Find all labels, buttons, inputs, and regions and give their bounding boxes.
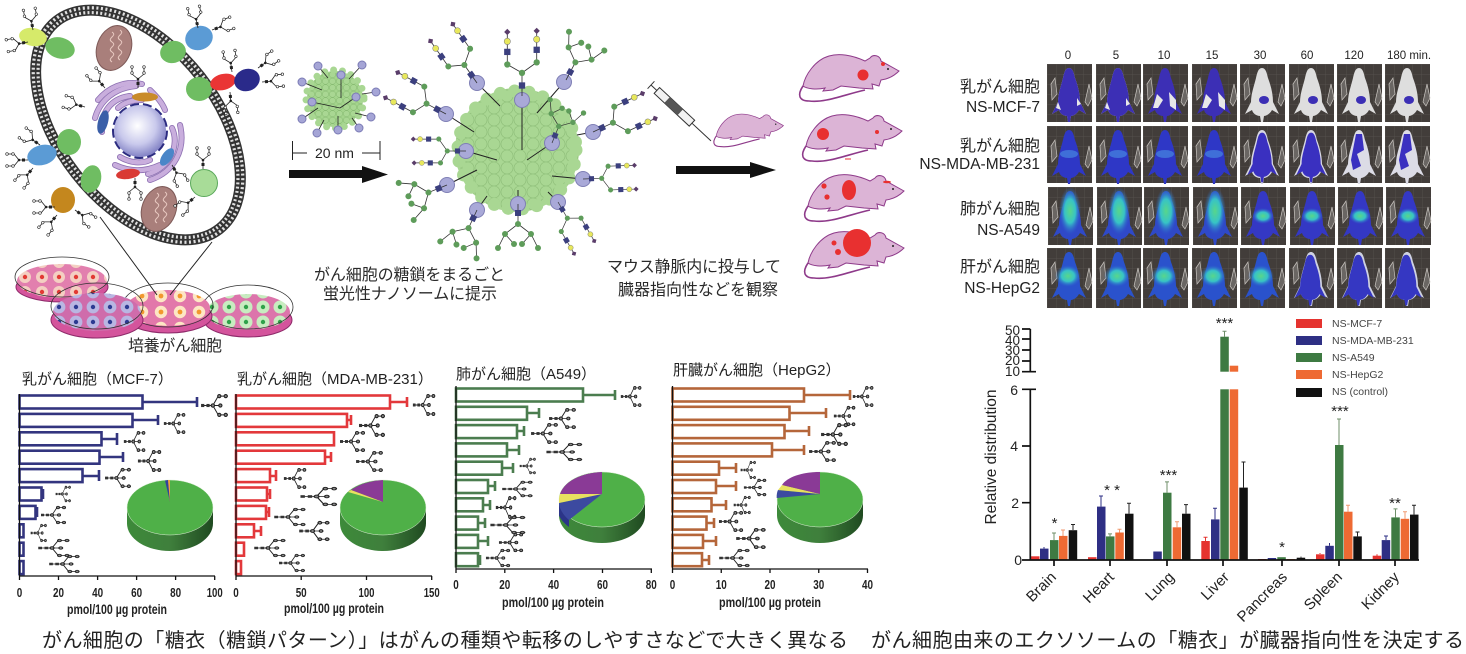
- tick labels: 150: [424, 585, 440, 600]
- golgi membranes: [95, 83, 182, 180]
- tick labels: 20: [53, 585, 64, 600]
- axis label: pmol/100 µg protein: [67, 602, 167, 617]
- tick labels: 10: [716, 577, 727, 592]
- tick labels: 60: [131, 585, 142, 600]
- y tick labels: [1005, 323, 1022, 568]
- row labels: 乳がん細胞: [960, 78, 1040, 96]
- y tick labels: 40: [1005, 333, 1020, 348]
- mitochondria: [90, 21, 183, 236]
- mouse 3: [805, 175, 904, 221]
- significance stars: *: [1279, 539, 1285, 556]
- tick labels: 40: [548, 577, 559, 592]
- tick labels: 100: [207, 585, 223, 600]
- syringe: [648, 81, 714, 145]
- imaging grid: [1047, 64, 1431, 308]
- panel: cancer cell with surface glycans: [0, 0, 285, 278]
- series: NS-MCF-7: [1031, 537, 1381, 560]
- legend: NS-MDA-MB-231: [1332, 335, 1414, 347]
- glycan structures: [719, 386, 873, 567]
- axis label: pmol/100 µg protein: [502, 595, 604, 610]
- heading: 肝臓がん細胞（HepG2）: [673, 362, 841, 379]
- tick labels: 20: [764, 577, 776, 592]
- significance stars: *: [1052, 515, 1058, 532]
- tick labels: [17, 585, 223, 600]
- tick labels: 30: [813, 577, 824, 592]
- bars: [20, 396, 197, 574]
- tick labels: 0: [670, 577, 675, 592]
- tick labels: 80: [170, 585, 181, 600]
- heading: 乳がん細胞（MCF-7）: [22, 371, 173, 388]
- mouse 2: [803, 115, 902, 161]
- tick labels: 0: [453, 577, 459, 592]
- significance stars: ***: [1160, 467, 1177, 484]
- caption: glycan display: がん細胞の糖鎖をまるごと: [314, 266, 505, 284]
- chart: A549: [453, 366, 657, 610]
- scale bar: 20 nm: [292, 141, 380, 161]
- tick labels: [453, 577, 657, 592]
- zoom lines: [100, 217, 212, 295]
- series: NS-MDA-MB-231: [1040, 496, 1390, 560]
- bars: [456, 388, 615, 566]
- small nanosome: [298, 61, 380, 137]
- category labels: Liver: [1198, 569, 1233, 604]
- vesicle: [173, 147, 218, 217]
- category labels: Heart: [1080, 568, 1118, 607]
- significance stars: ***: [1331, 403, 1349, 420]
- pie chart: [777, 472, 863, 543]
- tick labels: 80: [646, 577, 657, 592]
- mouse: injected: [714, 114, 783, 147]
- row labels: 肝がん細胞: [960, 258, 1040, 276]
- legend: NS (control): [1332, 386, 1388, 398]
- legend: NS-MCF-7: [1332, 318, 1382, 330]
- bars: [236, 396, 407, 574]
- tick labels: [670, 577, 873, 592]
- caption: injection: 臓器指向性などを観察: [618, 281, 778, 299]
- row labels: [919, 78, 1040, 297]
- pie chart: [559, 472, 645, 543]
- chart: HepG2: [670, 362, 873, 610]
- arrow: [289, 166, 388, 183]
- row labels: NS-A549: [977, 222, 1040, 239]
- mouse 4: [805, 229, 904, 278]
- significance stars: **: [1389, 495, 1401, 512]
- pie chart: [127, 480, 213, 551]
- tick labels: 40: [862, 577, 873, 592]
- heading: 肺がん細胞（A549）: [456, 366, 596, 383]
- y tick labels: 10: [1005, 364, 1020, 379]
- significance stars: * *: [1104, 482, 1120, 499]
- legend: [1296, 318, 1414, 398]
- arrow: [676, 162, 776, 178]
- axes: [672, 386, 868, 573]
- category labels: Spleen: [1301, 569, 1346, 614]
- row labels: 乳がん細胞: [960, 137, 1040, 155]
- time axis labels: 60: [1301, 50, 1313, 62]
- tick labels: 0: [233, 585, 239, 600]
- dish: orange cells: [123, 283, 213, 333]
- time axis labels: 0: [1065, 50, 1071, 62]
- series: NS-HepG2: [1059, 366, 1409, 560]
- pie chart: [340, 480, 426, 551]
- category labels: Kidney: [1358, 568, 1403, 613]
- row labels: NS-MCF-7: [966, 99, 1040, 116]
- row labels: NS-MDA-MB-231: [919, 156, 1040, 173]
- glycan structures: [31, 395, 228, 573]
- mouse 1: [800, 55, 899, 101]
- y tick labels: 4: [1010, 438, 1018, 454]
- y tick labels: 50: [1005, 323, 1020, 338]
- mice with organ signals: [800, 55, 904, 278]
- conclusion: right: がん細胞由来のエクソソームの「糖衣」が臓器指向性を決定する: [871, 629, 1464, 652]
- dish: red cells: [15, 257, 109, 302]
- row labels: NS-HepG2: [964, 280, 1040, 297]
- y tick labels: 2: [1011, 495, 1019, 511]
- time axis labels: 120: [1344, 50, 1364, 62]
- significance stars: [1052, 315, 1401, 556]
- significance stars: ***: [1216, 315, 1233, 332]
- chart: MDA-MB-231: [233, 371, 440, 616]
- axes: [456, 386, 652, 573]
- category labels: [1023, 568, 1403, 626]
- category labels: Brain: [1023, 569, 1060, 606]
- membrane receptors: [18, 22, 263, 213]
- surface glycans: [5, 5, 285, 237]
- chart: relative distribution by organ: [983, 315, 1419, 626]
- caption: injection: マウス静脈内に投与して: [607, 258, 781, 276]
- label: cultured cancer cells: 培養がん細胞: [128, 337, 222, 355]
- axis label: pmol/100 µg protein: [284, 601, 384, 616]
- axes: [20, 394, 215, 580]
- bars: [672, 388, 850, 566]
- series: NS-A549: [1050, 331, 1400, 560]
- time axis labels: 30: [1254, 50, 1266, 62]
- category labels: Lung: [1142, 569, 1178, 604]
- y axis title: Relative distribution: [983, 390, 1000, 524]
- chart: MCF-7: [17, 371, 228, 617]
- time axis labels: 5: [1113, 50, 1119, 62]
- axes: [236, 394, 432, 580]
- y tick labels: 20: [1005, 353, 1020, 368]
- category labels: Pancreas: [1234, 569, 1291, 626]
- nucleus: [113, 104, 167, 158]
- y tick labels: 6: [1010, 382, 1018, 398]
- tick labels: 50: [296, 585, 307, 600]
- tick labels: 100: [358, 585, 374, 600]
- time axis labels: 10: [1158, 50, 1170, 62]
- glycan-displaying nanosome: [381, 20, 659, 262]
- tick labels: 60: [597, 577, 608, 592]
- scale bar: 20 nm: 20 nm: [315, 145, 354, 161]
- tick labels: 40: [92, 585, 103, 600]
- axes: [1022, 329, 1419, 566]
- time axis labels: 15: [1206, 50, 1218, 62]
- time axis labels: [1065, 50, 1431, 62]
- axis label: pmol/100 µg protein: [719, 595, 821, 610]
- y tick labels: 30: [1005, 343, 1020, 358]
- legend: NS-HepG2: [1332, 369, 1384, 381]
- panel: culture dishes: [15, 217, 293, 338]
- legend: NS-A549: [1332, 352, 1375, 364]
- caption: glycan display: [314, 266, 505, 303]
- heading: 乳がん細胞（MDA-MB-231）: [237, 371, 433, 388]
- tick labels: [233, 585, 440, 600]
- cell membrane: [0, 0, 282, 278]
- y tick labels: 0: [1014, 552, 1022, 568]
- time axis labels: 180 min.: [1387, 50, 1431, 62]
- row labels: 肺がん細胞: [960, 200, 1040, 218]
- glycan structures: [486, 386, 641, 567]
- tick labels: 20: [499, 577, 510, 592]
- caption: injection: [607, 258, 781, 299]
- glycan structures: [254, 394, 435, 572]
- tick labels: 0: [17, 585, 22, 600]
- conclusion: left: がん細胞の「糖衣（糖鎖パターン）」はがんの種類や転移のしやすさなどで大きく異なる: [42, 629, 848, 652]
- dish: green cells: [203, 285, 293, 337]
- golgi glycoproteins: [62, 66, 189, 200]
- series: NS control: [1069, 462, 1418, 560]
- dish: blue cells: [51, 283, 143, 338]
- caption: glycan display: 蛍光性ナノソームに提示: [323, 285, 497, 303]
